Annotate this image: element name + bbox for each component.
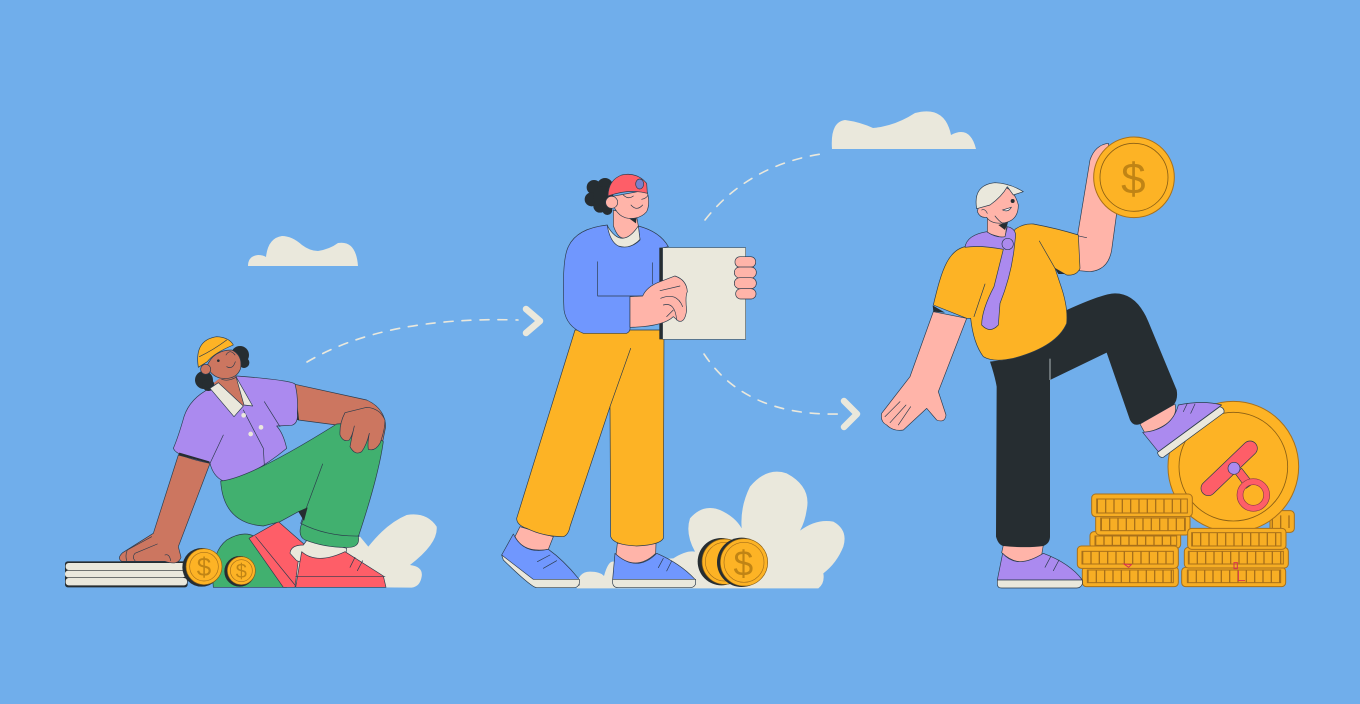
red cap <box>608 174 647 196</box>
arrow: dashed path to top cloud <box>705 153 828 220</box>
raised arm <box>1077 143 1117 272</box>
coin stack right <box>1182 528 1288 587</box>
big coin <box>1168 401 1299 532</box>
coin: front <box>717 538 768 587</box>
hair <box>585 178 613 215</box>
coin stack left <box>1077 494 1192 587</box>
cloud: top right <box>832 111 976 149</box>
coin: large <box>182 548 222 587</box>
hair <box>976 183 1023 209</box>
figure: standing person holding a notebook <box>502 174 845 588</box>
coin stack: behind big coin <box>1270 511 1294 532</box>
held coin: $ <box>1121 154 1146 203</box>
collar <box>607 226 640 247</box>
cloud: small left <box>248 236 358 266</box>
shirt <box>173 376 298 481</box>
collar <box>210 383 243 417</box>
head <box>207 350 241 378</box>
standing ankle <box>1002 545 1043 562</box>
coin stacks <box>1077 401 1299 587</box>
yellow cap <box>198 337 233 367</box>
right arm <box>295 384 386 442</box>
dark trousers <box>990 293 1177 547</box>
coin: large: $ <box>197 552 212 582</box>
head <box>611 190 649 218</box>
neck <box>613 210 638 238</box>
left shoe <box>502 534 579 588</box>
red marks <box>1124 563 1245 581</box>
head <box>977 185 1018 223</box>
hand on knee <box>340 407 385 453</box>
sock <box>290 538 347 564</box>
hanging arm <box>881 312 967 430</box>
front shoe <box>296 552 386 587</box>
left arm <box>119 455 210 563</box>
sweater <box>563 225 668 333</box>
coin: small <box>224 556 255 587</box>
trousers <box>517 330 664 546</box>
neck <box>213 375 244 406</box>
coin: small: $ <box>236 561 247 583</box>
shirt buttons <box>241 413 263 436</box>
gripping fingers <box>734 257 756 299</box>
purple scarf and tie <box>965 227 1016 329</box>
dark under chin <box>627 216 637 223</box>
arrow: second dashed path <box>704 354 857 427</box>
figure: seated person with books and coins <box>65 337 437 588</box>
held coin <box>1094 137 1174 218</box>
cloud: behind seated person <box>290 514 437 588</box>
book stack <box>65 561 188 587</box>
raised ankle <box>1140 404 1176 433</box>
coin: front: $ <box>734 544 754 583</box>
raised shoe <box>1143 402 1224 457</box>
ankles <box>515 527 553 550</box>
trousers <box>221 424 383 547</box>
shirt <box>933 224 1080 360</box>
standing shoe <box>997 553 1082 588</box>
hair <box>195 346 249 391</box>
cloud: behind coins <box>577 472 845 588</box>
notebook <box>659 248 746 339</box>
bush <box>213 534 287 587</box>
figure: person stepping on coins holding a coin <box>881 137 1299 588</box>
neck <box>987 218 1007 238</box>
arrow: first dashed path <box>307 309 540 362</box>
left hand <box>630 276 687 327</box>
back shoe <box>249 522 305 587</box>
right shoe <box>613 553 696 588</box>
coin: back <box>698 538 747 585</box>
